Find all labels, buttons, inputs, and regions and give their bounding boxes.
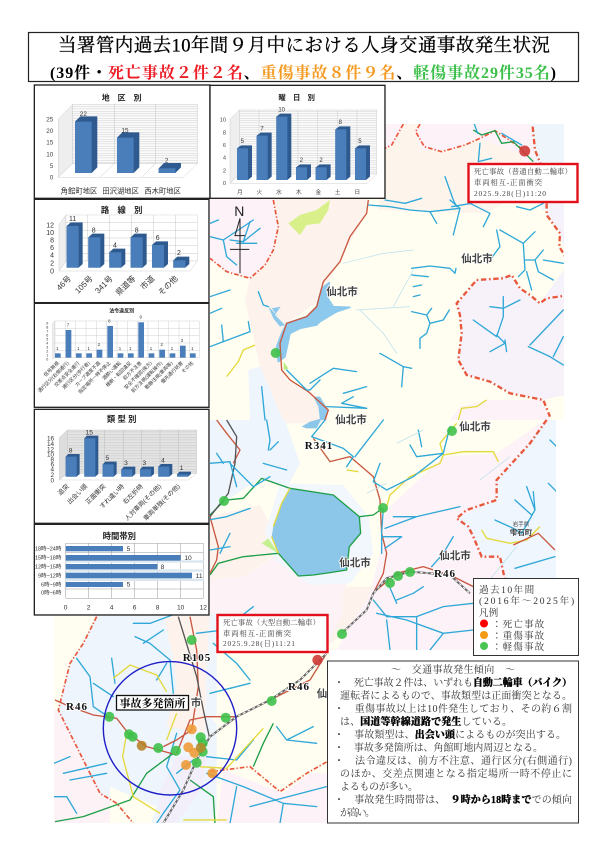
map labels: city names: 仙北市 — [339, 556, 371, 569]
chart plot: district: 15 — [46, 140, 54, 147]
chart plot: weekday: 金 — [315, 188, 321, 196]
chart plot: type: 1 — [180, 465, 184, 472]
chart plot: district: 22 — [80, 111, 87, 118]
chart plot: weekday: 4 — [223, 156, 226, 162]
chart plot: route: 4 — [113, 243, 117, 250]
chart plot: time: 12 — [200, 605, 207, 612]
chart plot: violation: 8 — [108, 318, 111, 323]
notes body text: ・ 法令違反は、前方不注意、通行区分(右側通行) — [334, 754, 572, 767]
chart plot: violation: 9 — [46, 321, 48, 325]
chart plot: weekday: 8 — [223, 130, 226, 136]
notes heading: ～ 交通事故発生傾向 ～ — [391, 663, 515, 676]
map labels: city names: 仙北市 — [439, 549, 471, 562]
chart plot: type — [47, 429, 197, 522]
map labels: city names: 仙北市 — [335, 413, 367, 426]
chart plot: violation: カーブ速度不適 — [73, 360, 102, 388]
chart plot: time: 6時~9時 — [41, 580, 62, 588]
legend: 凡例 — [479, 607, 499, 619]
chart plot: violation: 7 — [67, 322, 70, 327]
notes body text: のほか、交差点関連となる指定場所一時不停止に — [340, 767, 572, 780]
map regions north — [378, 120, 572, 213]
callout: fatal accident south: 2025.9.28(日)11:21 — [223, 639, 295, 648]
chart plot: weekday — [220, 107, 377, 196]
chart plot: violation: 2 — [46, 349, 48, 353]
panel: by time of day chart — [34, 524, 209, 615]
accident markers on map — [104, 146, 530, 778]
chart plot: weekday: 火 — [256, 189, 262, 196]
chart title: weekday: 曜 日 別 — [278, 93, 315, 102]
icon: north arrow: N — [234, 203, 244, 219]
chart plot: violation: 通行区分(歩行者) — [61, 360, 92, 391]
chart plot: type: 14 — [47, 441, 54, 448]
legend — [474, 578, 578, 656]
chart plot: violation: 前方不注意 — [121, 360, 144, 382]
map labels: route numbers: R105 — [183, 652, 211, 664]
chart plot: route — [46, 215, 197, 297]
chart plot: route: 2 — [50, 260, 54, 267]
notes body text: ・ 事故発生時間帯は、 ９時から18時まででの傾向 — [334, 793, 572, 806]
rivers of the central map — [210, 200, 563, 420]
callout: fatal accident south: 車両相互-正面衝突 — [223, 629, 292, 638]
chart plot: type: 2 — [50, 472, 54, 479]
chart plot: violation: 酒酔い運転 — [101, 360, 123, 382]
map labels: city names: 市 — [191, 696, 202, 709]
legend: (2016年～2025年) — [479, 595, 575, 607]
chart plot: route: 10 — [46, 230, 54, 237]
blue circle: accident-prone area — [103, 662, 237, 795]
chart plot: route: 6 — [50, 245, 54, 252]
chart plot: weekday: 10 — [278, 107, 286, 113]
notes body text — [334, 676, 572, 819]
chart plot: weekday: 7 — [260, 126, 264, 132]
chart plot: violation: 5 — [46, 337, 48, 341]
chart plot: violation: 1 — [87, 346, 90, 351]
map labels: city names: 雫石町 — [510, 528, 533, 537]
chart plot: district: 5 — [50, 163, 54, 170]
chart plot: time: 5 — [127, 546, 131, 553]
chart plot: weekday: 月 — [237, 189, 243, 196]
chart plot: route: 341号 — [93, 274, 115, 295]
chart plot: violation: 1 — [191, 346, 194, 351]
chart plot: time: 15時~18時 — [35, 554, 62, 562]
chart plot: weekday: 0 — [223, 181, 226, 187]
chart plot: violation: 優先通行妨害 — [159, 360, 185, 385]
chart plot: time: 0時~6時 — [41, 589, 62, 597]
chart plot: route: 県道等 — [113, 273, 137, 297]
panel: accident trend notes — [328, 661, 578, 823]
notes body text: 運転者によるもので、事故類型は正面衝突となる。 — [340, 689, 572, 702]
map regions south-west — [53, 607, 330, 827]
chart plot: district: 15 — [121, 127, 129, 134]
chart plot: weekday: 5 — [241, 139, 245, 145]
chart plot: time: 6 — [133, 605, 137, 612]
chart plot: time: 0 — [64, 605, 68, 612]
title line: 当署管内過去10年間９月中における人身交通事故発生状況 — [58, 34, 550, 56]
chart plot: weekday: 木 — [296, 188, 302, 196]
chart plot: route: 市道 — [138, 273, 156, 292]
legend item: minor: ：軽傷事故 — [492, 641, 545, 653]
chart plot: type: 右左折時 — [120, 481, 145, 506]
chart plot: weekday: 10 — [220, 117, 226, 123]
map labels: route numbers: R341 — [305, 440, 333, 452]
chart title: time: 時間帯別 — [103, 531, 136, 541]
chart plot: route: 12 — [46, 222, 54, 229]
fatal accident markers — [312, 146, 530, 665]
map labels: city names — [191, 252, 533, 709]
map labels: route numbers: R46 — [434, 568, 456, 580]
chart plot: weekday: 6 — [223, 143, 226, 149]
chart title: district: 地 区 別 — [102, 93, 142, 103]
chart plot: violation: 1 — [46, 353, 48, 357]
chart plot: type: 正面衝突 — [83, 481, 108, 506]
notes body text: ・ 事故多発箇所は、角館町地内周辺となる。 — [334, 741, 543, 754]
chart plot: weekday: 2 — [319, 158, 323, 164]
map regions centre — [210, 197, 570, 423]
chart plot: type: 車両単独(その他) — [141, 482, 182, 522]
notes body text: は、国道等幹線道路で発生している。 — [340, 715, 512, 728]
chart plot: time: 18時~24時 — [35, 545, 62, 553]
chart plot: time — [35, 543, 207, 612]
chart plot: time: 5 — [127, 582, 131, 589]
chart plot: type: 3 — [142, 460, 146, 467]
chart plot: violation: 3 — [181, 338, 184, 343]
chart plot: type: 8 — [50, 456, 54, 463]
chart plot: route: 11 — [69, 216, 76, 223]
chart plot: violation: 安全不確認(後方) — [123, 360, 154, 391]
chart plot: violation — [36, 315, 199, 395]
chart plot: violation: 動静注視(車両等) — [143, 360, 175, 391]
callout: fatal accident north: 2025.9.28(日)11:20 — [474, 189, 546, 198]
chart plot: route: 8 — [50, 238, 54, 245]
chart plot: violation: 2 — [160, 342, 163, 347]
chart plot: type: すれ違い時 — [97, 481, 127, 510]
chart plot: type: 4 — [161, 457, 165, 464]
chart plot: violation: その他 — [180, 360, 195, 375]
callout: fatal accident south: 死亡事故（大型自動二輪車） — [223, 618, 320, 627]
chart plot: time: 10 — [177, 605, 185, 612]
chart plot: violation: 1 — [77, 346, 80, 351]
notes body text: が高い。 — [340, 806, 375, 819]
chart plot: violation: 交差点安全進行 — [53, 360, 82, 389]
map labels: city names: 岩手県 — [513, 520, 530, 528]
map labels: route numbers: R46 — [66, 701, 88, 713]
chart plot: weekday: 日 — [354, 189, 360, 196]
chart plot: time: 8 — [156, 605, 160, 612]
chart plot: violation: 前方注視(運転操作) — [130, 360, 164, 394]
chart plot: district: 2 — [165, 158, 169, 165]
chart plot: type: 16 — [47, 436, 54, 443]
chart plot: violation: 3 — [46, 345, 48, 349]
chart plot: route: 0 — [50, 268, 54, 275]
chart plot: violation: 6 — [46, 333, 48, 337]
chart plot: time: 8 — [161, 564, 165, 571]
chart plot: time: 12時~15時 — [35, 563, 62, 571]
panel: by accident type chart — [34, 409, 209, 523]
chart plot: violation: 1 — [171, 346, 174, 351]
chart plot: district: 10 — [46, 151, 54, 158]
chart plot: type: 12 — [47, 446, 54, 453]
chart plot: weekday: 2 — [300, 158, 304, 164]
chart plot: weekday: 8 — [339, 120, 343, 126]
chart title: route: 路 線 別 — [101, 205, 142, 215]
chart plot: district: 田沢湖地区 — [102, 186, 139, 195]
map labels: city names: 仙北市 — [461, 252, 493, 265]
chart plot: type: 8 — [69, 447, 73, 454]
chart plot: weekday: 水 — [276, 188, 282, 196]
chart plot: type: 人対車両(その他) — [122, 482, 163, 522]
callout: fatal accident south — [218, 615, 328, 652]
chart plot: route: 6 — [156, 235, 160, 242]
chart plot: route: 8 — [92, 227, 96, 234]
map labels: city names: 仙北市 — [326, 285, 358, 298]
chart plot: violation: 4 — [46, 341, 48, 345]
panel: by route chart — [34, 199, 209, 303]
map labels: city names: 仙 — [317, 687, 327, 700]
map labels: route numbers — [66, 440, 456, 713]
chart plot: time: 10 — [184, 555, 192, 562]
chart plot: violation: 指定場所一時不停止 — [77, 360, 113, 395]
chart plot: violation: 7 — [46, 329, 48, 333]
chart plot: time: 11 — [196, 573, 203, 580]
subtitle with severity counts: (39件・死亡事故２件２名、重傷事故８件９名、軽傷事故29件35名) — [50, 63, 556, 82]
chart plot: district: 0 — [50, 175, 54, 182]
panel: by district chart — [34, 85, 210, 198]
chart plot: weekday: 2 — [223, 168, 226, 174]
map labels: city names: 仙北市 — [459, 420, 491, 433]
chart plot: type: 4 — [50, 467, 54, 474]
notes body text: ・ 事故類型は、出会い頭によるものが突出する。 — [334, 728, 566, 741]
chart plot: district: 25 — [46, 116, 54, 123]
chart plot: type: 0 — [50, 477, 54, 484]
chart plot: type: 出会い頭 — [65, 481, 90, 506]
legend item: serious: ：重傷事故 — [492, 630, 545, 642]
chart plot: time: 4 — [110, 605, 114, 612]
chart plot: violation: 2 — [98, 342, 101, 347]
chart plot: district: 20 — [46, 128, 54, 135]
chart plot: violation: 1 — [150, 346, 153, 351]
panel: by weekday chart — [210, 85, 385, 198]
chart plot: time: 2 — [87, 605, 91, 612]
chart plot: route: 8 — [135, 227, 139, 234]
minor accident markers — [104, 348, 457, 768]
chart plot: violation: 9 — [139, 315, 142, 320]
notes body text: よるものが多い。 — [340, 780, 418, 793]
map labels: route numbers: R46 — [288, 681, 310, 693]
chart plot: route: 46号 — [55, 274, 73, 292]
chart plot: weekday: 5 — [358, 139, 362, 145]
chart plot: route: 105号 — [73, 274, 95, 295]
label: accident-prone area: 事故多発箇所 — [120, 696, 186, 710]
chart plot: district — [46, 104, 198, 195]
notes body text: ・ 重傷事故以上は10件発生しており、その約６割 — [334, 702, 572, 715]
chart title: violation: 法令違反別 — [109, 308, 134, 315]
chart plot: district: 角館町地区 — [61, 186, 97, 195]
chart plot: violation: 8 — [46, 325, 48, 329]
serious accident markers — [137, 724, 217, 778]
chart plot: violation: 1 — [56, 346, 59, 351]
callout: fatal accident north: 死亡事故（普通自動二輪車） — [474, 167, 572, 176]
chart plot: route: 4 — [50, 253, 54, 260]
chart plot: violation: 1 — [129, 346, 132, 351]
chart plot: violation: 通行区分(右側通行) — [36, 360, 71, 394]
chart plot: weekday: 土 — [335, 188, 341, 196]
chart plot: violation: 横断・転回違反 — [104, 360, 133, 389]
map: Senboku area base map — [53, 120, 572, 827]
chart plot: type: 追突 — [55, 481, 71, 497]
chart plot: route: その他 — [156, 273, 180, 297]
chart plot: type: 3 — [124, 460, 128, 467]
chart plot: type: 6 — [50, 462, 54, 469]
chart plot: type: 5 — [105, 455, 109, 462]
map regions south-east and lake — [207, 418, 557, 650]
chart plot: violation: 1 — [119, 346, 122, 351]
chart plot: type: 10 — [47, 451, 54, 458]
chart plot: violation: 信号無視 — [42, 360, 61, 378]
notes body text: ・ 死亡事故２件は、いずれも自動二輪車（バイク） — [334, 676, 572, 689]
legend item: fatal: ：死亡事故 — [492, 618, 545, 630]
chart plot: time: 9時~12時 — [38, 571, 62, 579]
callout: fatal accident north: 車両相互-正面衝突 — [474, 178, 543, 187]
chart plot: route: 2 — [177, 250, 181, 257]
panel: by violation chart — [34, 303, 209, 407]
chart plot: district: 西木町地区 — [144, 186, 181, 195]
legend: 過去10年間 — [479, 584, 535, 596]
chart plot: type: 15 — [86, 429, 93, 436]
icon: north arrow — [230, 203, 249, 273]
callout: fatal accident north — [468, 164, 578, 202]
chart plot: violation: 0 — [46, 357, 48, 361]
chart title: type: 類 型 別 — [107, 414, 136, 424]
title box — [28, 32, 578, 82]
